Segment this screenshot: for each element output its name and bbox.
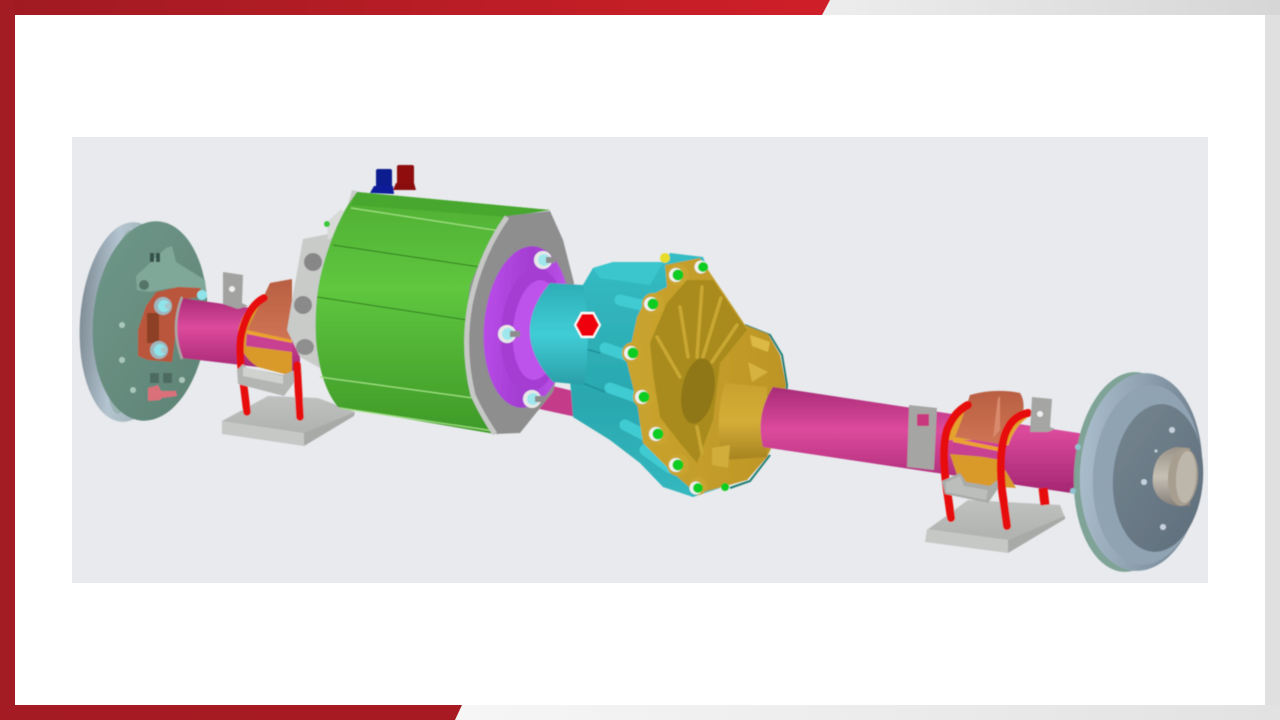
teal gearbox housing — [563, 253, 720, 497]
frame: bottom bar — [0, 705, 1280, 720]
motor end plate: front — [464, 211, 574, 434]
left brown pad — [247, 279, 292, 340]
end plate light rim — [467, 217, 507, 434]
left cradle — [237, 364, 302, 396]
right axle tube — [761, 387, 1085, 494]
frame: left bar — [0, 0, 15, 720]
right rear U-bolt — [944, 405, 968, 518]
purple flange — [477, 243, 577, 411]
gold output boss — [719, 383, 767, 460]
right axle collar — [945, 406, 1028, 488]
flange bolts — [154, 297, 172, 315]
right axle bracket — [907, 405, 937, 470]
right front U-bolt — [1001, 413, 1028, 526]
left brake valve — [148, 385, 177, 401]
rear axle segment — [535, 383, 590, 420]
right hub — [1153, 447, 1190, 506]
frame: right bar — [1265, 15, 1280, 705]
right drum stud holes — [1141, 427, 1175, 530]
gold bolt lobes — [622, 264, 707, 495]
frame: top bar — [0, 0, 1280, 15]
right brown pad — [955, 391, 1024, 444]
left mounting tab — [223, 272, 248, 309]
gold recessed face — [650, 280, 747, 463]
gold differential cover — [622, 258, 787, 495]
right mount base plate — [925, 500, 1065, 553]
left brown flange — [138, 287, 207, 362]
drum mount studs — [1070, 444, 1081, 494]
left mount base plate — [222, 396, 355, 446]
motor green housing — [316, 192, 550, 434]
gold ribs — [657, 287, 737, 453]
teal input boss — [530, 283, 588, 385]
left front U-bolt — [297, 365, 300, 417]
left axle tube — [176, 297, 300, 372]
flange bolts — [498, 251, 555, 408]
right rear U-bolt legs — [1043, 488, 1045, 505]
left rear U-bolt — [240, 298, 264, 412]
axle assembly illustration — [73, 165, 1209, 576]
right brake drum — [1067, 368, 1209, 576]
red hex plug — [574, 312, 601, 338]
blue connector — [370, 169, 394, 194]
image panel background — [72, 137, 1208, 583]
left brake backing plate — [73, 216, 215, 426]
right mounting tab — [1030, 397, 1055, 432]
yellow plug — [660, 253, 670, 263]
green cover bolts — [624, 260, 729, 494]
gold central disc — [677, 356, 719, 426]
red connector — [393, 165, 416, 190]
left axle collar — [238, 298, 292, 376]
right cradle — [942, 473, 1004, 503]
motor end plate: rear — [287, 190, 360, 368]
